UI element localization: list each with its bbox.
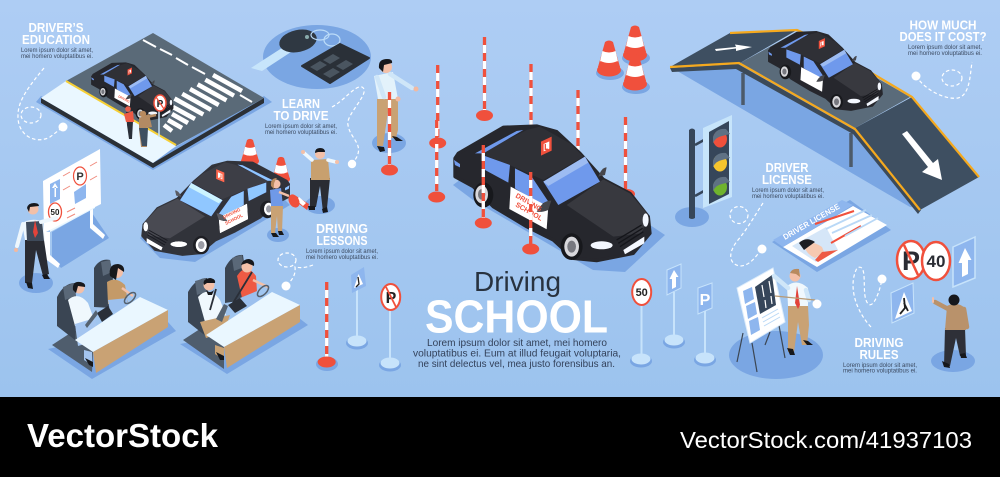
title block <box>413 266 621 370</box>
heading: driver's education: EDUCATION <box>22 33 90 47</box>
heading: learn to drive: Lorem ipsum dolor sit amet, <box>265 123 337 130</box>
icon: driver license card <box>772 200 891 272</box>
panel: driving lessons car with instructor <box>140 139 339 262</box>
main car: DRIVING <box>514 193 543 214</box>
dashed path: lessons <box>278 253 313 290</box>
instructor in vest <box>301 148 339 213</box>
sign: parking on pole: P <box>700 292 711 309</box>
no parking sign on tile: P <box>157 99 164 110</box>
heading: learn to drive: mei homero voluptatibus ei. <box>265 129 337 136</box>
dashed path: education <box>18 68 68 140</box>
heading: driving rules: DRIVING <box>854 336 904 350</box>
board easel: P <box>76 171 84 183</box>
heading: driving lessons: Lorem ipsum dolor sit amet, <box>306 248 378 255</box>
heading: driver's education <box>21 21 93 60</box>
sign: no parking: P <box>902 246 920 276</box>
board easel <box>43 149 105 268</box>
panel: driver's education road tile <box>36 33 272 170</box>
presenter man <box>774 269 815 355</box>
title description: voluptatibus ei. Eum at illud feugait voluptaria, <box>413 348 621 360</box>
panel: driving lessons car with instructor: DRIVING <box>222 207 242 220</box>
title description <box>413 337 621 370</box>
image id: VectorStock.com/41937103 <box>680 427 972 453</box>
heading: how much does it cost: HOW MUCH <box>910 18 976 32</box>
heading: driver's education: Lorem ipsum dolor sit amet, <box>21 47 93 54</box>
car on road: DRIVING <box>118 94 131 104</box>
heading: how much does it cost: DOES IT COST? <box>900 30 986 44</box>
heading: driver license <box>752 161 824 200</box>
sign: speed 50 on pole <box>630 279 652 368</box>
heading: driving lessons: mei homero voluptatibus ei. <box>306 254 378 261</box>
panel: presenter with flip chart <box>729 268 823 379</box>
woman by car <box>270 178 289 237</box>
panel: simulator desk two <box>180 255 308 374</box>
sign: no parking on pole: P <box>386 290 397 307</box>
logo: VectorStock: VectorStock <box>27 417 219 454</box>
fallen cone <box>286 192 309 210</box>
heading: learn to drive <box>265 97 337 136</box>
traffic poles behind car <box>381 37 635 202</box>
dashed path: learn <box>332 87 364 168</box>
heading: driving rules <box>843 336 917 374</box>
panel: simulator desk one <box>48 260 176 379</box>
heading: driving lessons: LESSONS <box>316 234 368 248</box>
title: Driving: Driving <box>474 266 561 297</box>
footer band <box>0 397 1000 477</box>
sign: pedestrian crossing on pole <box>346 267 368 350</box>
sign: up arrow <box>953 237 975 287</box>
heading: driver's education: DRIVER’S <box>28 21 84 35</box>
person: man pointing at signs <box>931 294 975 372</box>
heading: how much does it cost: Lorem ipsum dolor sit amet, <box>908 44 982 51</box>
instructor person <box>14 203 56 293</box>
heading: driver license: mei homero voluptatibus ei. <box>752 193 824 200</box>
flip chart <box>737 268 785 343</box>
board easel: 50 <box>51 208 60 217</box>
heading: driving lessons <box>306 222 378 261</box>
sign: up arrow on pole <box>663 264 685 348</box>
people on sidewalk <box>124 106 156 147</box>
dashed path: license <box>730 203 766 266</box>
heading: driver license: Lorem ipsum dolor sit amet, <box>752 187 824 194</box>
no parking sign on tile <box>154 95 166 137</box>
sign: speed 40: 40 <box>927 252 945 271</box>
heading: driver license: LICENSE <box>762 173 812 187</box>
sign: speed 50 on pole: 50 <box>636 287 648 299</box>
person: learn to drive man <box>372 59 418 153</box>
heading: driving rules: Lorem ipsum dolor sit amet, <box>843 362 917 369</box>
title: SCHOOL: SCHOOL <box>425 290 608 342</box>
heading: how much does it cost <box>900 18 986 57</box>
panel: driving lessons car with instructor: SCHOOL <box>224 213 244 226</box>
heading: driver license: DRIVER <box>766 161 808 175</box>
dashed path: rules <box>853 267 886 327</box>
car on road <box>91 63 173 120</box>
panel: sign board with instructor <box>14 149 109 293</box>
main car <box>453 126 665 272</box>
main car: SCHOOL <box>514 202 544 223</box>
title description: ne sint delectus vel, mea justo forensibus an. <box>418 358 615 370</box>
car on ramp <box>768 32 882 110</box>
icon: car keys <box>251 25 371 89</box>
ramp road <box>670 30 979 214</box>
heading: driving lessons: DRIVING <box>316 222 368 236</box>
title description: Lorem ipsum dolor sit amet, mei homero <box>427 337 607 349</box>
heading: how much does it cost: mei homero voluptatibus ei. <box>908 50 982 57</box>
heading: learn to drive: TO DRIVE <box>274 109 328 123</box>
sign: no parking on pole <box>379 284 401 372</box>
icon: traffic light <box>675 115 732 227</box>
icon: three cones <box>596 26 650 94</box>
heading: driving rules: RULES <box>860 348 898 362</box>
poles in front of car <box>475 145 539 254</box>
dashed path: cost <box>912 62 972 98</box>
sign: pedestrian crossing <box>891 283 914 323</box>
heading: driving rules: mei homero voluptatibus ei. <box>843 368 917 374</box>
sign: parking on pole <box>694 283 716 366</box>
panel: rule signs <box>891 237 975 323</box>
icon: driver license card: DRIVER LICENSE <box>782 202 842 242</box>
lone pole <box>316 282 338 371</box>
heading: driver's education: mei homero voluptatibus ei. <box>21 53 93 60</box>
heading: learn to drive: LEARN <box>282 97 320 111</box>
